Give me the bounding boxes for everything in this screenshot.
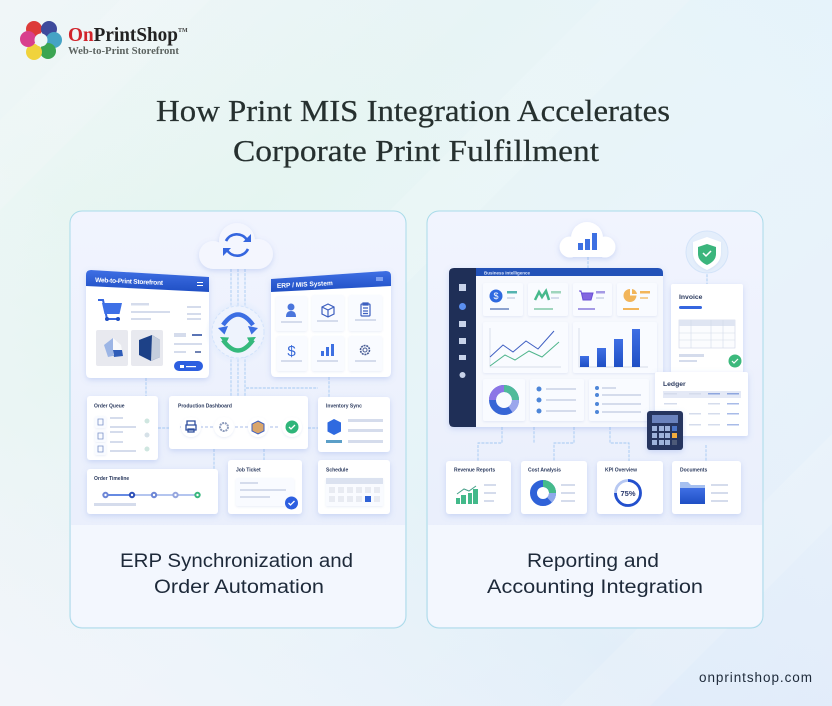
icon: user bbox=[286, 304, 296, 317]
caption: ERP synchronization: ERP Synchronization and bbox=[120, 551, 353, 572]
workflow steps bbox=[180, 417, 302, 437]
panel: ERP MIS system window bbox=[271, 271, 391, 377]
panel: order timeline: Order Timeline bbox=[94, 476, 129, 482]
ticket card bbox=[236, 478, 294, 506]
donut card bbox=[483, 379, 525, 421]
panel: web-to-print storefront window bbox=[86, 270, 209, 378]
button bbox=[174, 361, 203, 371]
website url: onprintshop.com bbox=[699, 670, 812, 685]
panel: job ticket: Job Ticket bbox=[236, 468, 261, 474]
panel: order timeline bbox=[87, 469, 218, 514]
caption: reporting and accounting: Accounting Integration bbox=[487, 577, 703, 598]
icon: box bbox=[322, 304, 334, 317]
stock bars bbox=[326, 419, 383, 443]
icon: calculator bbox=[647, 411, 683, 450]
icon: invoice check bbox=[728, 354, 742, 368]
panel: reporting and accounting bbox=[427, 211, 763, 628]
panel: order queue: Order Queue bbox=[94, 404, 125, 410]
panel: invoice: Invoice bbox=[679, 294, 703, 301]
panel: documents bbox=[672, 461, 741, 514]
panel: schedule: Schedule bbox=[326, 468, 348, 474]
title bbox=[156, 93, 670, 168]
panel: schedule bbox=[318, 460, 390, 514]
panel: revenue reports: Revenue Reports bbox=[454, 468, 495, 474]
panel: job ticket bbox=[228, 460, 302, 514]
icon: folder bbox=[680, 482, 705, 504]
panel: cost analysis bbox=[521, 461, 587, 514]
activity card bbox=[589, 379, 649, 421]
chart: KPI gauge: 75% bbox=[620, 489, 636, 498]
window title: ERP / MIS System bbox=[277, 280, 333, 290]
panel: ledger: Ledger bbox=[663, 381, 686, 388]
title: Corporate Print Fulfillment bbox=[233, 133, 599, 168]
panel: cost analysis: Cost Analysis bbox=[528, 468, 561, 474]
calendar grid bbox=[326, 478, 383, 506]
connectors bbox=[146, 269, 329, 469]
caption: ERP synchronization: Order Automation bbox=[154, 577, 324, 598]
stat cards: $ bbox=[493, 291, 499, 301]
icon: security shield bbox=[686, 231, 728, 273]
panel: inventory sync bbox=[318, 397, 390, 452]
icon: cube bbox=[328, 419, 341, 435]
bar chart bbox=[573, 322, 657, 373]
line chart bbox=[483, 322, 568, 373]
document lines bbox=[711, 484, 728, 502]
panel: production dashboard: Production Dashboard bbox=[178, 404, 232, 410]
order rows bbox=[95, 416, 150, 455]
panel: KPI overview: KPI Overview bbox=[605, 468, 637, 474]
title: How Print MIS Integration Accelerates bbox=[156, 93, 670, 128]
ledger table bbox=[663, 391, 741, 426]
caption: ERP synchronization bbox=[120, 551, 353, 598]
text: dollar: $ bbox=[287, 343, 296, 360]
panel: revenue reports bbox=[446, 461, 511, 514]
stat cards bbox=[483, 283, 657, 316]
icon: bars bbox=[321, 344, 334, 356]
icon: gear bbox=[360, 346, 370, 354]
icon: cloud sync bbox=[199, 223, 273, 269]
caption: reporting and accounting bbox=[487, 551, 703, 598]
panel: documents: Documents bbox=[680, 468, 707, 474]
brand name: OnPrintShop bbox=[68, 24, 178, 46]
order controls bbox=[174, 333, 202, 353]
panel: production dashboard bbox=[169, 396, 308, 449]
panel: order queue bbox=[87, 396, 158, 460]
product text lines bbox=[131, 303, 201, 320]
panel: ERP synchronization bbox=[70, 211, 406, 628]
ERP module tiles bbox=[276, 295, 382, 371]
icon: central sync hub bbox=[205, 299, 271, 365]
trademark: TM bbox=[178, 28, 188, 34]
list card bbox=[530, 379, 584, 421]
icon: shopping cart bbox=[98, 300, 122, 321]
sidebar bbox=[449, 268, 476, 427]
header bar: Business Intelligence bbox=[484, 270, 531, 276]
chart: revenue bbox=[456, 484, 496, 504]
timeline track bbox=[94, 493, 200, 506]
icon: clipboard bbox=[361, 303, 370, 316]
header bar bbox=[476, 268, 663, 276]
product image: box bbox=[131, 330, 163, 366]
icon: cloud with bars bbox=[560, 222, 616, 258]
connectors bbox=[478, 257, 707, 461]
window title: Web-to-Print Storefront bbox=[95, 277, 164, 287]
panel: inventory sync: Inventory Sync bbox=[326, 404, 362, 410]
panel: KPI overview bbox=[597, 461, 663, 514]
product image: brochures bbox=[96, 330, 128, 366]
tagline: Web-to-Print Storefront bbox=[68, 46, 180, 57]
icon: check badge bbox=[285, 496, 298, 510]
icon: logo petals bbox=[20, 21, 62, 60]
logo bbox=[20, 21, 188, 60]
caption: reporting and accounting: Reporting and bbox=[527, 551, 659, 572]
invoice totals bbox=[679, 354, 704, 362]
tile labels bbox=[281, 319, 376, 362]
invoice table bbox=[679, 320, 735, 348]
panel: ledger bbox=[655, 372, 748, 436]
panel: business intelligence dashboard bbox=[449, 268, 663, 427]
chart: cost donut bbox=[534, 484, 575, 502]
panel: invoice bbox=[671, 284, 743, 373]
